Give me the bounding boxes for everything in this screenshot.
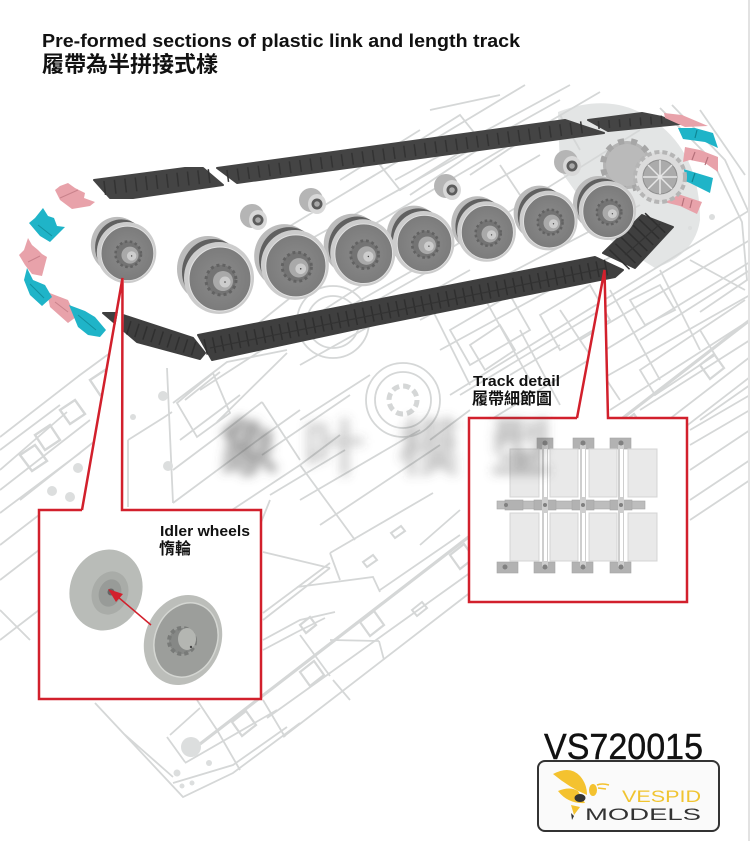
logo: vespid models: VESPID xyxy=(622,787,701,806)
title: 履帶為半拼接式樣 xyxy=(42,52,218,77)
illustration: track links xyxy=(497,438,657,573)
label: idler wheels xyxy=(159,523,250,558)
label: idler wheels: 惰輪 xyxy=(159,539,191,558)
product code: VS720015 xyxy=(544,726,703,767)
logo: vespid models xyxy=(538,761,719,831)
watermark: 型 xyxy=(490,415,552,484)
label: track detail: Track detail xyxy=(473,374,560,390)
lower track sections xyxy=(103,215,673,360)
label: track detail xyxy=(472,374,560,408)
return rollers xyxy=(240,150,581,230)
road wheels xyxy=(177,176,636,314)
watermark: 叶 xyxy=(303,415,365,484)
watermark xyxy=(218,415,552,484)
watermark: 模 xyxy=(398,415,460,484)
watermark: 象 xyxy=(218,415,280,484)
label: idler wheels: Idler wheels xyxy=(160,523,250,540)
icon: bee xyxy=(553,770,609,820)
title xyxy=(42,30,521,77)
upper track sections xyxy=(94,113,680,198)
link pieces: right xyxy=(662,113,718,214)
idler wheel xyxy=(91,217,156,283)
title: Pre-formed sections of plastic link and length track xyxy=(42,30,521,51)
link pieces: left xyxy=(19,183,106,337)
callout: track detail xyxy=(469,270,687,602)
logo: vespid models: MODELS xyxy=(585,805,701,824)
illustration: wheel pair xyxy=(58,539,235,697)
label: track detail: 履帶細節圖 xyxy=(472,389,552,408)
callout: idler wheels xyxy=(39,278,261,699)
sprocket xyxy=(603,141,685,202)
